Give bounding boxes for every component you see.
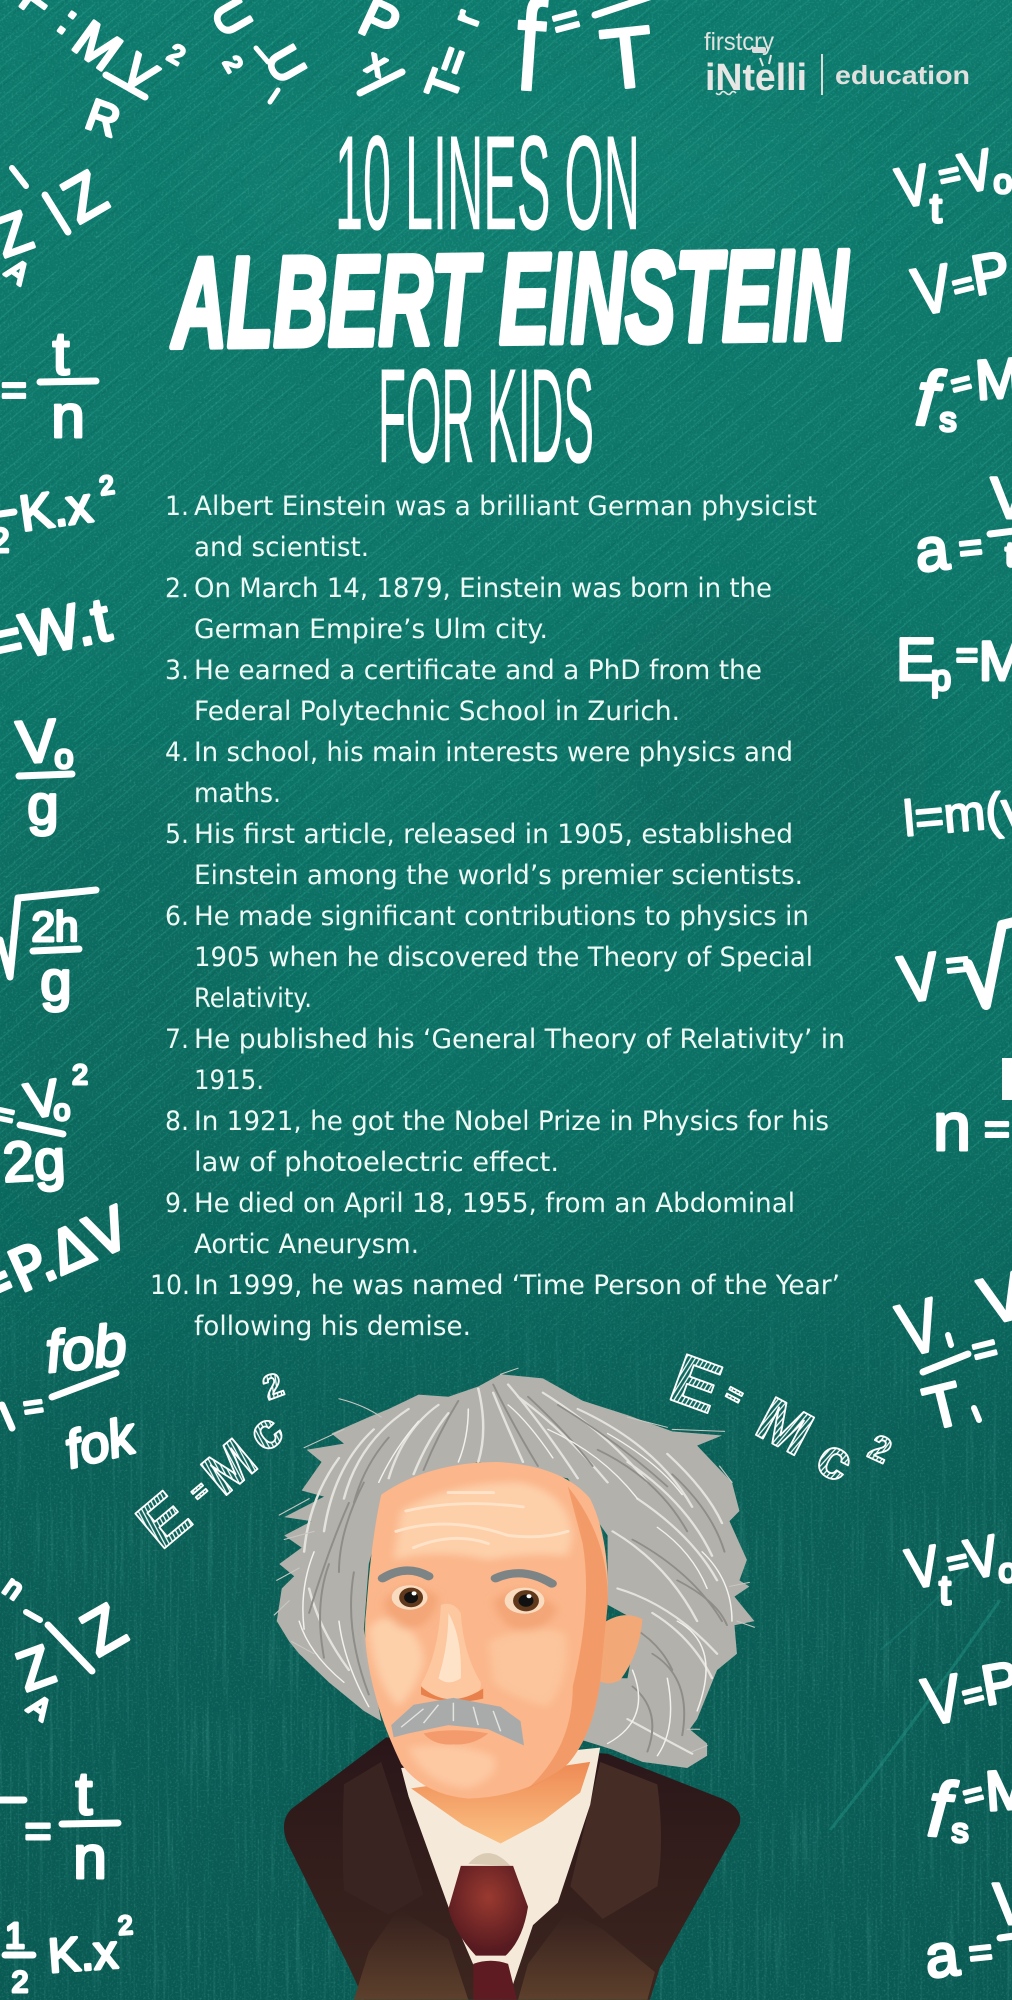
formula: 1/2 K.x2 upper — [0, 469, 116, 560]
formula: V0/g: o — [55, 738, 73, 776]
formula: sqrt 2h/g: 2h — [32, 903, 78, 950]
fact 5: His first article, released in 1905, established — [194, 819, 793, 850]
E=mc2 right chalk lettering: E — [661, 1339, 731, 1428]
fact 7: He published his ‘General Theory of Relativity’ in — [194, 1024, 845, 1055]
face — [365, 1462, 608, 1799]
fact 2: On March 14, 1879, Einstein was born in the — [194, 573, 772, 604]
lower left coat panel — [354, 1909, 468, 2000]
logo: FirstCry Intelli education: education — [835, 60, 970, 90]
formula: Ep=M: p — [931, 657, 951, 698]
formula: Vt=V0 upper: o — [994, 163, 1012, 201]
formula: P x l — [351, 0, 409, 93]
formula: Z/Z upper: Z — [51, 158, 118, 237]
fact 2 — [165, 573, 772, 645]
formula: tau: T= — [416, 40, 480, 106]
formula: Vt=V0 upper: = — [935, 153, 964, 197]
formula: f = 1/T — [511, 0, 658, 119]
eye left — [392, 1585, 428, 1610]
formula: 1/2 K.x2 lower: 2 — [117, 1910, 134, 1940]
formula: Vt=V0 upper: t — [930, 184, 942, 231]
formula: a=V lower: = — [967, 1930, 995, 1976]
fact 7: 7. — [165, 1024, 189, 1055]
hair — [277, 1374, 754, 1768]
fact 5: 5. — [165, 819, 189, 850]
logo: FirstCry Intelli education: iNtelli — [705, 57, 807, 99]
formula: fs=M lower: s — [952, 1812, 968, 1850]
formula: Vt=V0 lower: V — [960, 1524, 1005, 1592]
right lapel — [570, 1762, 661, 1919]
fact 7: 1915. — [194, 1065, 264, 1096]
formula: =t/n lower — [0, 1760, 118, 1891]
formula: fob/fok — [2, 1312, 143, 1480]
formula: a=V/t upper — [912, 466, 1012, 585]
collar shadow — [468, 1853, 511, 1866]
fact 1: Albert Einstein was a brilliant German physicist — [194, 491, 817, 522]
illustration: Albert Einstein portrait — [274, 1368, 754, 2000]
formula: V0/g: V — [14, 707, 59, 776]
formula: top left F=M.V2/R: V — [113, 45, 166, 102]
fact 3: 3. — [165, 655, 189, 686]
formula: V1/T1 = V: V — [890, 1283, 948, 1373]
fact 2: 2. — [165, 573, 189, 604]
formula: Vt=V0 lower — [902, 1524, 1012, 1613]
E=mc2 right chalk lettering: M — [746, 1384, 824, 1469]
formula: V=P lower: = — [958, 1672, 988, 1717]
fact 6: 1905 when he discovered the Theory of Special — [194, 942, 813, 973]
formula: =t/n upper: n — [51, 383, 85, 450]
formula: U2-U1: 2 — [217, 52, 248, 77]
formula: fs=M upper: s — [940, 401, 956, 439]
fact 4: 4. — [165, 737, 189, 768]
fact 4: maths. — [194, 778, 281, 809]
E=mc2 left chalk lettering: = — [184, 1475, 215, 1507]
formula: 1/2 K.x2 lower: 1 — [5, 1915, 25, 1956]
formula: V0 squared / 2g: 2g — [1, 1127, 67, 1194]
E=mc2 left chalk lettering: c — [236, 1402, 294, 1462]
formula: =t/n lower: = — [25, 1805, 51, 1857]
fact 4 — [165, 737, 793, 809]
formula: tau — [416, 5, 488, 106]
formula: V0 squared / 2g: 2 — [72, 1059, 88, 1090]
formula: top left F=M.V2/R — [11, 0, 190, 147]
formula: Ep=M — [896, 626, 1012, 698]
formula: fob/fok: = — [21, 1387, 46, 1427]
fact 10: In 1999, he was named ‘Time Person of the Year’ — [194, 1270, 840, 1301]
fact 9: 9. — [165, 1188, 189, 1219]
formula: Ep=M: = — [956, 635, 978, 677]
shirt and collar — [401, 1748, 600, 1984]
upper lip — [424, 1730, 488, 1744]
soft face highlights — [369, 1482, 573, 1788]
formula: Z/Z lower: Z — [8, 1632, 62, 1703]
ear — [598, 1615, 642, 1683]
formula: V0/g: g — [27, 773, 59, 836]
formula: top left F=M.V2/R: 2 — [163, 38, 190, 71]
formula: fs=M upper: f — [913, 353, 948, 443]
formula: top left F=M.V2/R: M — [62, 10, 132, 82]
nose shadow — [421, 1686, 483, 1702]
tie knot and blade — [448, 1866, 528, 1956]
E=mc2 right chalk lettering: c — [807, 1424, 865, 1494]
fact 6 — [165, 901, 813, 1014]
fact 3 — [165, 655, 762, 727]
tie lower blade — [473, 1961, 517, 2000]
formula: Vt=V0 lower: t — [939, 1566, 951, 1613]
formula: U2-U1: U — [255, 37, 317, 91]
formula: V=P upper: V — [907, 250, 957, 329]
formula: Ep=M: E — [896, 626, 936, 693]
formula: 1/2 K.x2 upper: 2 — [97, 469, 116, 501]
formula: V0 squared / 2g: V — [21, 1069, 64, 1130]
formula: n=: = — [984, 1105, 1010, 1154]
formula: Vt=V0 upper: V — [954, 138, 999, 206]
fact 4: In school, his main interests were physics and — [194, 737, 793, 768]
formula: =t/n lower: n — [73, 1824, 107, 1891]
fact 10: following his demise. — [194, 1311, 471, 1342]
formula: fob/fok: fob — [42, 1312, 129, 1385]
fact 5 — [165, 819, 803, 891]
formula: V0/g — [14, 707, 73, 836]
formula: Vt=V0 upper: V — [892, 153, 934, 220]
fact 9: He died on April 18, 1955, from an Abdominal — [194, 1188, 795, 1219]
formula: fs=M upper — [913, 345, 1012, 443]
fact 6: Relativity. — [194, 983, 312, 1014]
formula: 1/2 K.x2 lower: 2 — [12, 1966, 28, 1999]
fact 9 — [165, 1188, 795, 1260]
fact 3: He earned a certificate and a PhD from the — [194, 655, 762, 686]
fact 2: German Empire’s Ulm city. — [194, 614, 548, 645]
formula: 1/2 K.x2 upper: K.x — [16, 476, 95, 542]
formula: V1/T1 = V: T — [917, 1369, 969, 1443]
formula: sqrt 2h/g: g — [40, 949, 72, 1012]
formula: 1/2 K.x2 lower — [5, 1910, 134, 1999]
formula: fs=M lower — [925, 1756, 1012, 1854]
infographic canvas: FOR KIDS — [378, 342, 594, 491]
moustache strands — [401, 1703, 501, 1731]
E=mc2 right chalk lettering: = — [720, 1377, 749, 1412]
formula: fob/fok: fok — [59, 1406, 143, 1480]
formula: Vt=V0 lower: = — [943, 1540, 972, 1584]
jacket — [284, 1737, 740, 2000]
formula: f = 1/T: T — [596, 9, 658, 109]
formula: n= — [933, 1058, 1012, 1165]
formula: Z/Z lower: A — [22, 1689, 57, 1727]
formula: Z/Z lower: Z — [70, 1591, 137, 1670]
nose highlight — [438, 1613, 461, 1682]
formula: V=P lower — [917, 1649, 1012, 1739]
left column formulas — [0, 158, 143, 1999]
fact 5: Einstein among the world’s premier scientists. — [194, 860, 803, 891]
formula: sqrt 2h/g — [0, 890, 96, 1012]
left lapel — [343, 1762, 424, 1915]
formula: a=V lower: a — [922, 1920, 963, 1991]
formula: =t/n lower: t — [76, 1760, 93, 1827]
formula: V=sqrt: V — [894, 939, 944, 1017]
formula: P x l: x — [360, 40, 394, 85]
E=mc2 right chalk lettering — [661, 1339, 898, 1494]
eye right — [505, 1588, 544, 1614]
fact 3: Federal Polytechnic School in Zurich. — [194, 696, 680, 727]
moustache — [391, 1698, 524, 1746]
fact 9: Aortic Aneurysm. — [194, 1229, 419, 1260]
fact 6: He made significant contributions to physics in — [194, 901, 809, 932]
right column formulas — [890, 138, 1012, 1991]
logo: FirstCry Intelli education — [704, 28, 970, 99]
formula: tau: r — [445, 5, 488, 30]
nose — [421, 1604, 481, 1703]
fact 6: 6. — [165, 901, 189, 932]
neck — [411, 1762, 590, 1843]
formula: a=V/t upper: = — [957, 525, 985, 571]
E=mc2 right chalk lettering: 2 — [863, 1426, 898, 1471]
formula: fs=M lower: f — [925, 1764, 960, 1854]
formula: Z/Z lower — [0, 1570, 137, 1727]
fact 1 — [165, 491, 817, 563]
fact 10: 10. — [150, 1270, 190, 1301]
formula: V=P upper: = — [948, 262, 978, 307]
formula: a=V/t upper: a — [912, 514, 953, 585]
formula: Vt=V0 upper — [892, 138, 1012, 231]
hair strands — [274, 1368, 754, 1756]
formula: V=sqrt — [894, 922, 1012, 1017]
fact 8: law of photoelectric effect. — [194, 1147, 559, 1178]
face shading right — [528, 1486, 608, 1788]
formula: V=P lower: V — [917, 1660, 967, 1739]
formula: V0 squared / 2g — [0, 1059, 88, 1194]
formula: Z/Z upper: A — [0, 253, 35, 291]
formula: =t/n upper: = — [1, 366, 27, 415]
formula: top left F=M.V2/R: R — [80, 90, 126, 147]
formula: a=V lower — [922, 1872, 1012, 1991]
formula: V1/T1 = V — [890, 1256, 1012, 1443]
formula: Vt=V0 lower: V — [902, 1534, 944, 1601]
formula: V1/T1 = V: = — [967, 1323, 1002, 1375]
fact 1: and scientist. — [194, 532, 369, 563]
E=mc2 left chalk lettering: 2 — [258, 1366, 289, 1408]
forehead wrinkles — [396, 1493, 568, 1548]
formula: V=sqrt: = — [944, 942, 972, 988]
logo: FirstCry Intelli education: firstcry — [704, 28, 774, 56]
formula: Z/Z upper — [0, 158, 118, 291]
formula: V=P upper — [907, 239, 1012, 329]
formula: U2-U1 — [201, 0, 317, 102]
E=mc2 left chalk lettering: M — [190, 1427, 269, 1507]
fact 8: In 1921, he got the Nobel Prize in Physics for his — [194, 1106, 829, 1137]
fact 10 — [150, 1270, 840, 1342]
formula: =t/n upper: t — [53, 320, 70, 387]
formula: n=: n — [933, 1089, 971, 1165]
formula: fs=M lower: = — [959, 1774, 988, 1816]
lower right coat panel — [518, 1911, 655, 2000]
fact 8: 8. — [165, 1106, 189, 1137]
fact 7 — [165, 1024, 845, 1096]
formula: fs=M upper: = — [947, 363, 976, 405]
E=mc2 left chalk lettering: E — [123, 1477, 204, 1562]
fact 8 — [165, 1106, 829, 1178]
numbered list of ten facts — [150, 491, 845, 1342]
formula: =t/n upper — [1, 320, 96, 450]
formula: 1/2 K.x2 lower: K.x — [46, 1926, 119, 1983]
eyebrows — [383, 1571, 552, 1584]
fact 1: 1. — [165, 491, 189, 522]
E=mc2 left chalk lettering — [123, 1366, 294, 1562]
formula: V0 squared / 2g: o — [54, 1094, 70, 1127]
